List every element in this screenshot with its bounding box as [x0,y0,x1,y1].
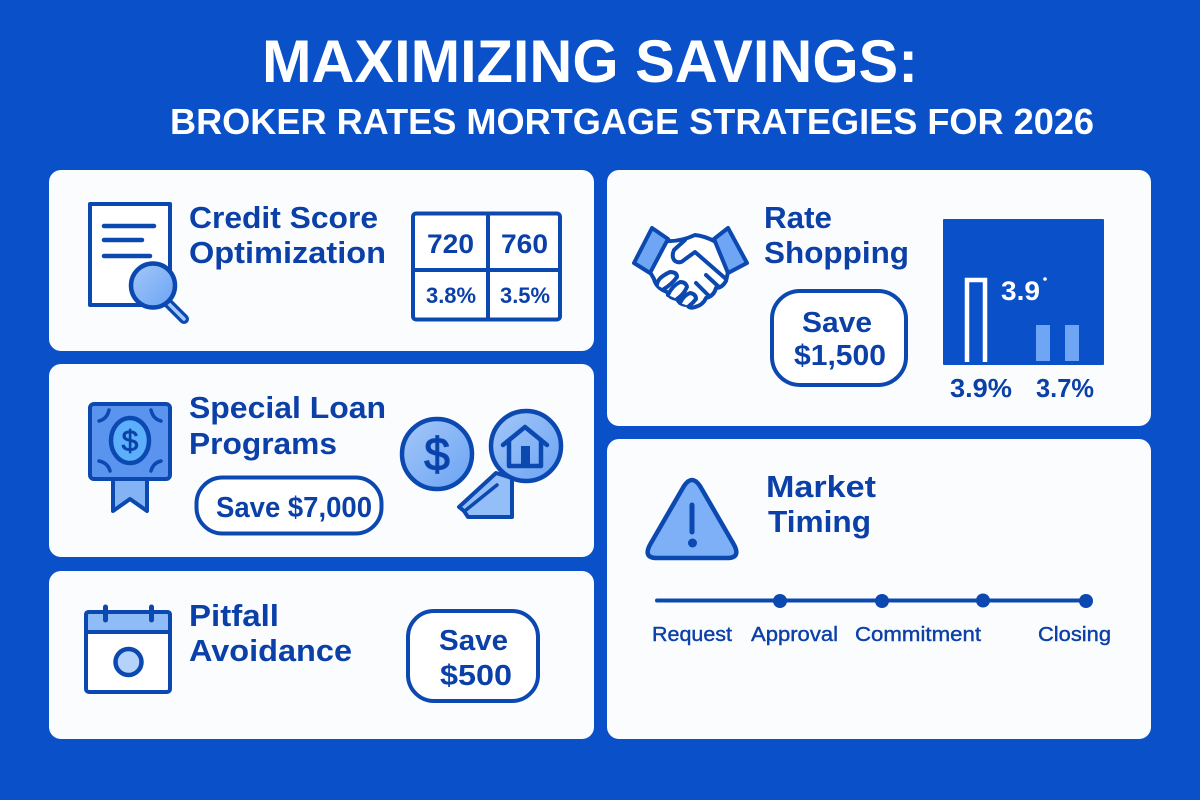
heading: pitfall avoidance: Pitfall [189,598,279,633]
heading: rate shopping: Shopping [764,235,909,270]
callout: save $1,500: $1,500 [794,340,886,372]
icon: calendar [86,607,170,692]
table: credit scores and rates [413,214,560,320]
timeline: loan process [652,594,1111,646]
icon: warning triangle [648,480,736,558]
callout: save $1,500 [772,291,906,385]
callout: save $7,000: Save $7,000 [216,492,372,524]
bar chart: rate comparison: 3.9 [1001,276,1040,306]
panel: special loan programs [49,364,594,557]
heading: market timing: Market [766,469,876,504]
table: credit scores and rates: 760 [501,229,548,259]
panel: rate shopping [607,170,1151,426]
heading: credit score optimization: Optimization [189,235,386,270]
callout: save $500: $500 [440,660,512,692]
panel: pitfall avoidance [49,571,594,739]
bar chart: rate comparison: 3.7% [1036,373,1094,403]
panel: credit score optimization [49,170,594,351]
timeline: loan process: Closing [1038,624,1111,646]
callout: save $500: Save [439,625,508,657]
table: credit scores and rates: 3.5% [500,283,550,308]
callout: save $1,500: Save [802,307,872,339]
icon: certificate ribbon [90,404,170,511]
title [170,28,1094,142]
icon: document with magnifier [90,204,184,319]
icon: certificate ribbon: $ [122,425,139,458]
table: credit scores and rates: 3.8% [426,283,476,308]
heading: rate shopping [764,200,909,270]
heading: market timing: Timing [768,504,871,539]
icon: dollar circle: $ [424,428,450,480]
bar chart: rate comparison [943,219,1104,403]
icon: handshake [634,228,747,308]
heading: credit score optimization: Credit Score [189,200,378,235]
callout: save $7,000 [196,478,382,534]
timeline: loan process: Approval [751,624,838,646]
bar chart: rate comparison: 3.9% [950,373,1012,403]
heading: special loan programs: Special Loan [189,390,386,425]
title: MAXIMIZING SAVINGS: [262,28,918,95]
heading: rate shopping: Rate [764,200,832,235]
heading: credit score optimization [189,200,386,270]
timeline: loan process: Request [652,624,732,646]
title: BROKER RATES MORTGAGE STRATEGIES FOR 2026 [170,101,1094,142]
callout: save $500 [408,611,538,701]
timeline: loan process: Commitment [855,624,981,646]
icon: house circle with arrow [459,411,561,517]
table: credit scores and rates: 720 [427,229,474,259]
heading: special loan programs [189,390,386,461]
heading: pitfall avoidance [189,598,352,668]
panel: market timing [607,439,1151,739]
heading: pitfall avoidance: Avoidance [189,633,352,668]
heading: special loan programs: Programs [189,426,337,461]
icon: dollar circle [402,419,472,489]
heading: market timing [766,469,876,539]
